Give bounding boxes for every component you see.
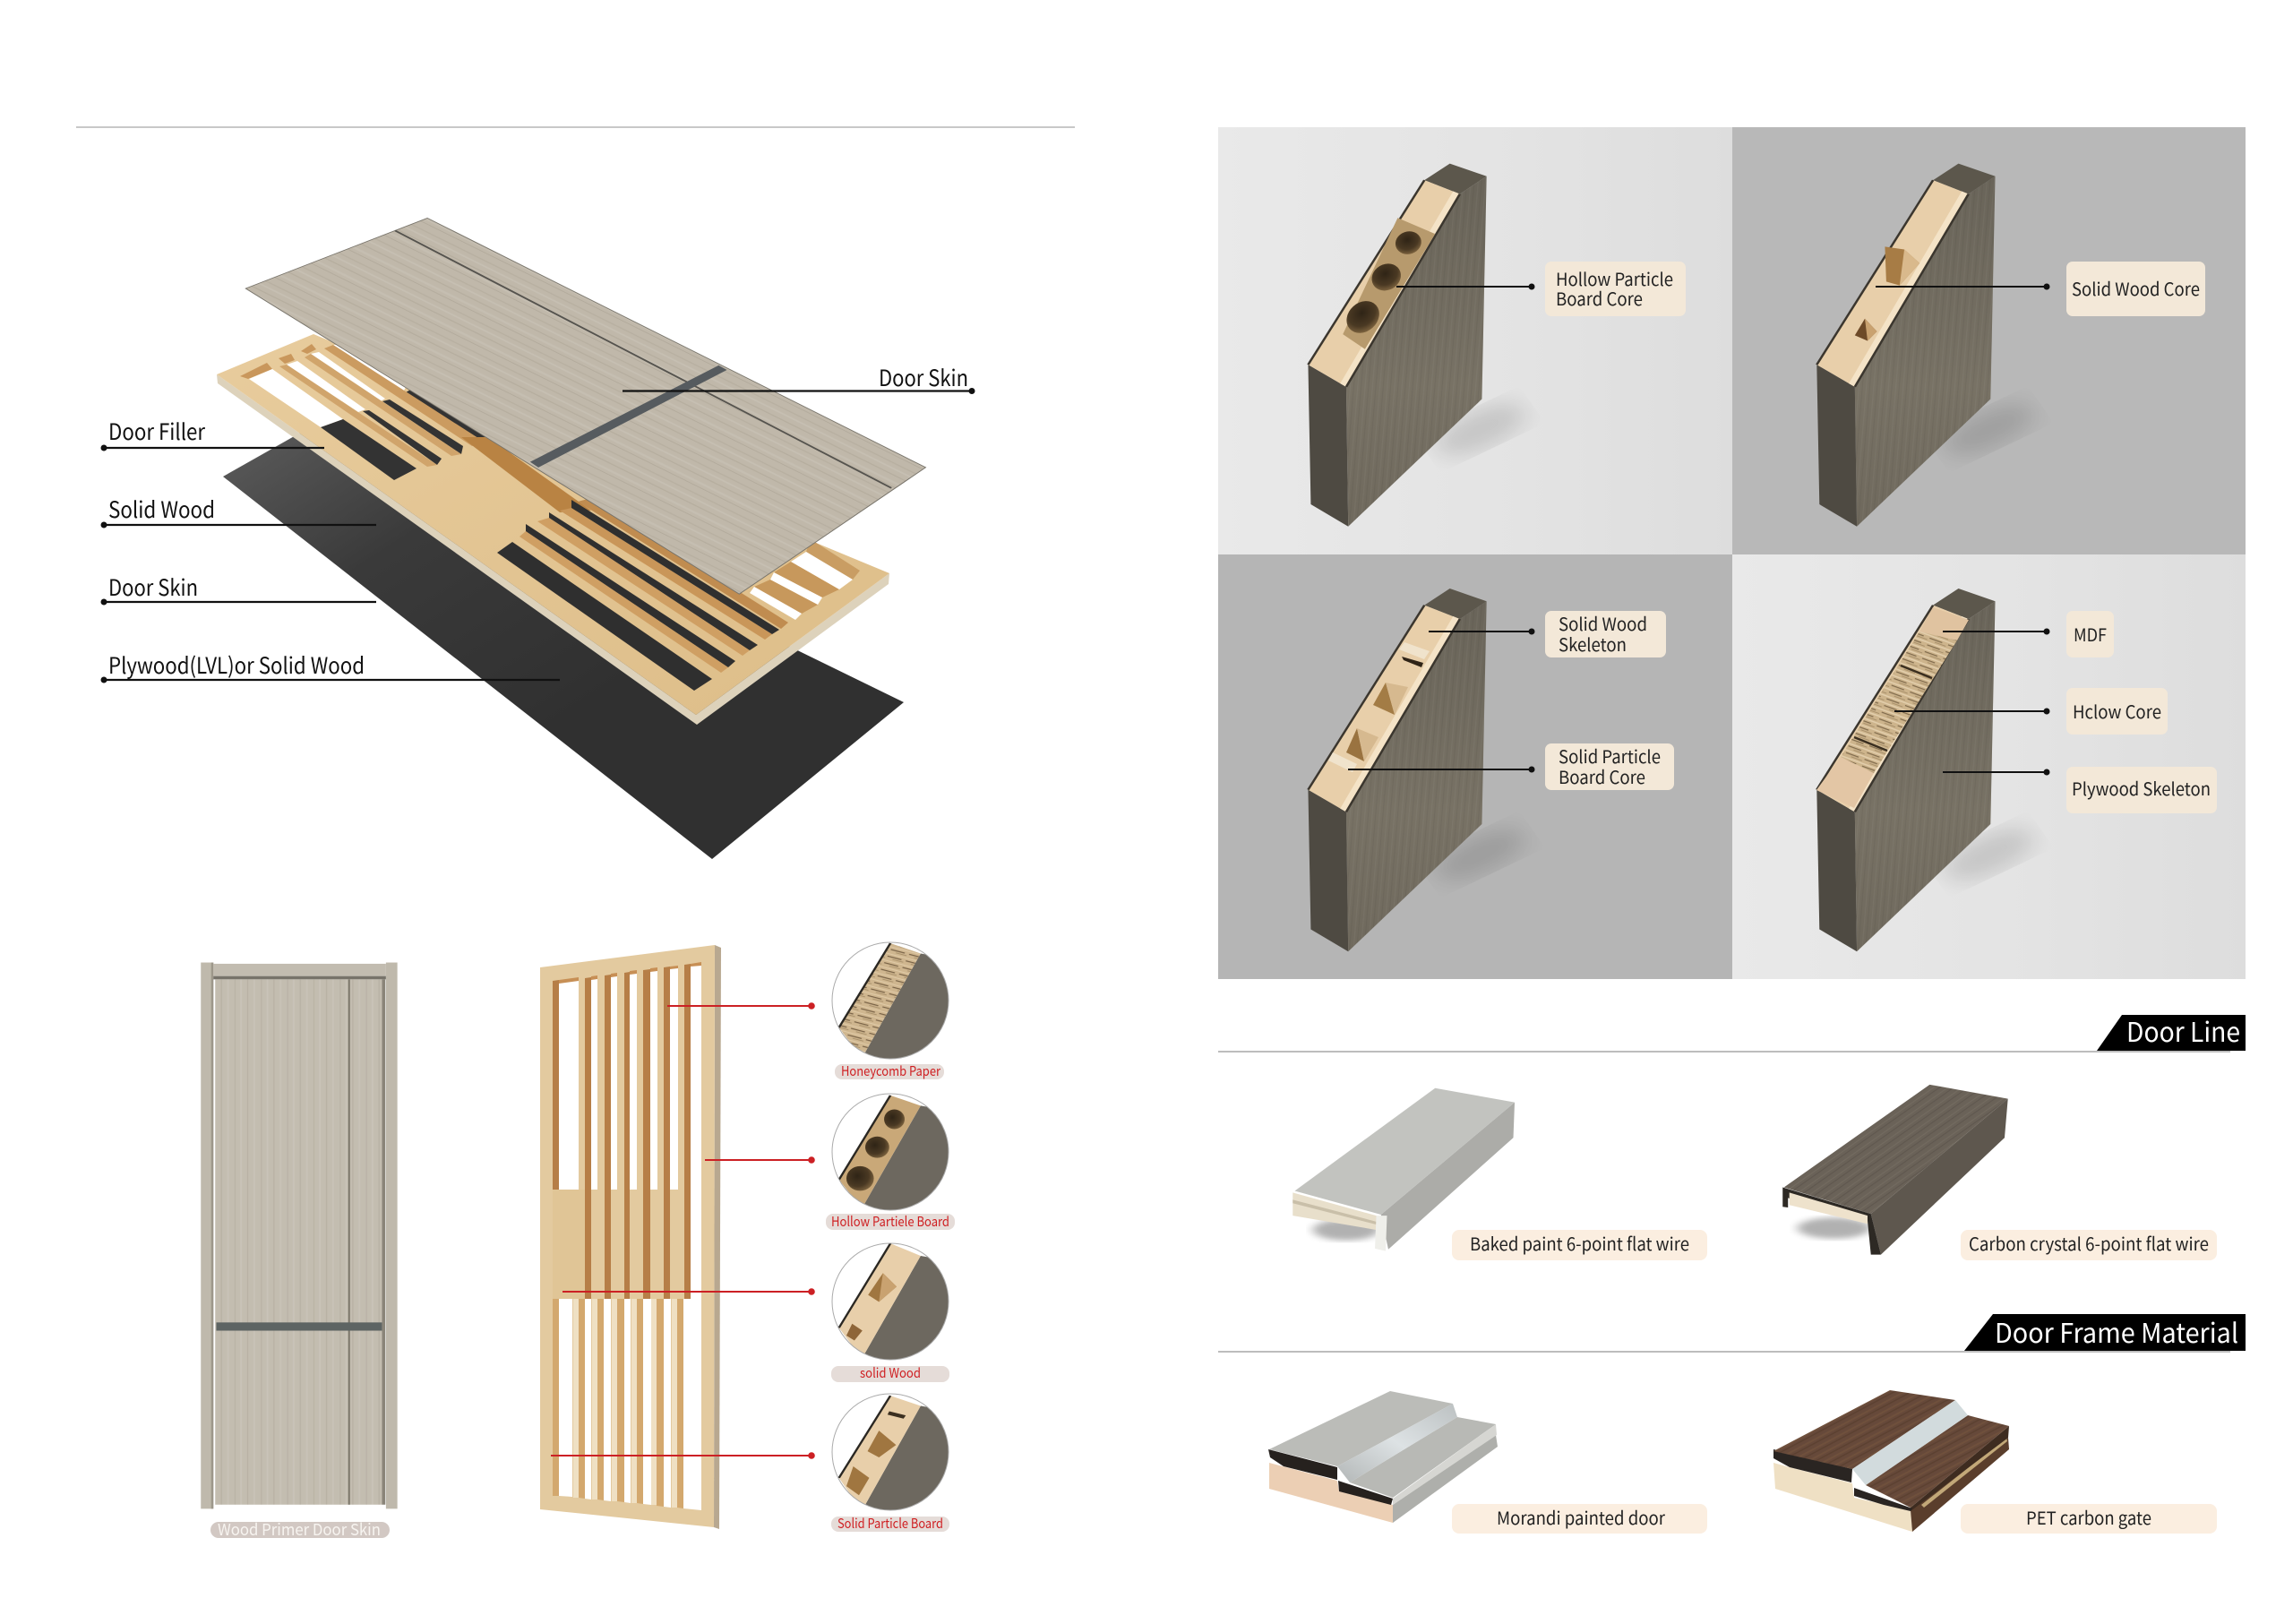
callout: Plywood or Solid Wood: Plywood(LVL)or Solid Wood [108, 649, 365, 681]
plywood sheet [223, 419, 904, 859]
red leader lines [551, 1003, 814, 1458]
callout: Door Skin top [623, 361, 975, 394]
callout: Solid Wood: Solid Wood [108, 493, 215, 525]
detail circle: solid wood [831, 1243, 949, 1360]
product: PET carbon gate [1773, 1390, 2217, 1534]
callout: Plywood or Solid Wood [100, 649, 560, 683]
product: baked paint flat wire [1292, 1088, 1707, 1260]
callout: solid wood skeleton: Solid Wood [1559, 610, 1647, 636]
section header: Door Frame Material: Door Frame Material [1995, 1311, 2238, 1351]
section header: Door Line: Door Line [2126, 1010, 2240, 1050]
panel: honeycomb core [1732, 554, 2246, 979]
callout: solid wood skeleton: Skeleton [1559, 631, 1627, 657]
label: Carbon crystal 6-point flat wire [1969, 1230, 2209, 1256]
door elevation [201, 963, 398, 1508]
door block 4 [1816, 589, 2042, 951]
callout: MDF: MDF [2074, 621, 2107, 647]
callout: Solid Wood [100, 493, 376, 528]
centre solid block [553, 1190, 585, 1299]
callout: solid wood core [1876, 262, 2205, 316]
product: carbon crystal flat wire [1782, 1085, 2217, 1260]
door block 1 [1308, 164, 1534, 527]
caption: Honeycomb Paper: Honeycomb Paper [841, 1061, 940, 1080]
callout: hollow particle board core [1396, 262, 1686, 316]
caption: solid Wood [831, 1363, 949, 1382]
door caption: Wood Primer Door Skin [218, 1517, 381, 1541]
callout: hollow particle board core: Hollow Particle [1556, 265, 1673, 291]
detail circle: hollow particle board [831, 1093, 949, 1211]
panel: solid wood core [1732, 127, 2246, 554]
panel: hollow particle board core [1218, 127, 1732, 554]
left end holes [240, 363, 272, 379]
caption: Hollow Partiele Board: Hollow Partiele Board [831, 1212, 949, 1231]
detail circle: honeycomb paper [831, 942, 949, 1059]
callout: solid particle board core: Solid Particle [1559, 743, 1661, 769]
callout: Plywood Skeleton: Plywood Skeleton [2072, 775, 2211, 801]
label [1961, 1504, 2217, 1534]
callout: Door Skin top: Door Skin [879, 361, 968, 393]
callout: solid wood core: Solid Wood Core [2072, 275, 2200, 301]
callout: solid wood skeleton [1429, 610, 1666, 657]
door block 3 [1308, 589, 1534, 951]
upper openings [559, 965, 701, 1510]
callout: solid particle board core [1348, 743, 1674, 790]
callout: Door Filler [100, 415, 324, 451]
upper slat sides [553, 964, 691, 1299]
callout: Plywood Skeleton [1943, 767, 2217, 813]
label: Morandi painted door [1497, 1504, 1665, 1530]
callout: Door Skin lower: Door Skin [108, 571, 198, 603]
door block 2 [1816, 164, 2042, 527]
lower long holes [520, 531, 728, 673]
callout: Hclow Core: Hclow Core [2073, 698, 2161, 724]
callout: Door Skin lower [100, 571, 376, 606]
label [1452, 1504, 1707, 1534]
caption: solid Wood: solid Wood [860, 1363, 921, 1382]
top door skin [245, 218, 925, 594]
label: Baked paint 6-point flat wire [1470, 1230, 1689, 1256]
label: PET carbon gate [2026, 1504, 2151, 1530]
lower openings [559, 1299, 671, 1508]
product: Morandi painted door [1268, 1391, 1707, 1534]
callout: Door Filler: Door Filler [108, 415, 205, 447]
detail circle: solid particle board [831, 1394, 949, 1510]
wood frame [217, 334, 889, 725]
callout: solid particle board core: Board Core [1559, 763, 1645, 789]
section header: Door Line [1218, 1010, 2246, 1053]
callout: hollow particle board core: Board Core [1556, 285, 1643, 311]
panel: solid wood skeleton [1218, 554, 1732, 979]
callout: MDF [1943, 611, 2114, 657]
top divider left [76, 126, 1075, 128]
right end bars and gaps [806, 539, 860, 580]
callout: Hclow Core [1894, 688, 2168, 735]
section header: Door Frame Material [1218, 1311, 2246, 1353]
lower slat sides [553, 1299, 683, 1508]
wood skeleton frame [540, 945, 721, 1529]
caption: Solid Particle Board: Solid Particle Board [837, 1514, 943, 1533]
